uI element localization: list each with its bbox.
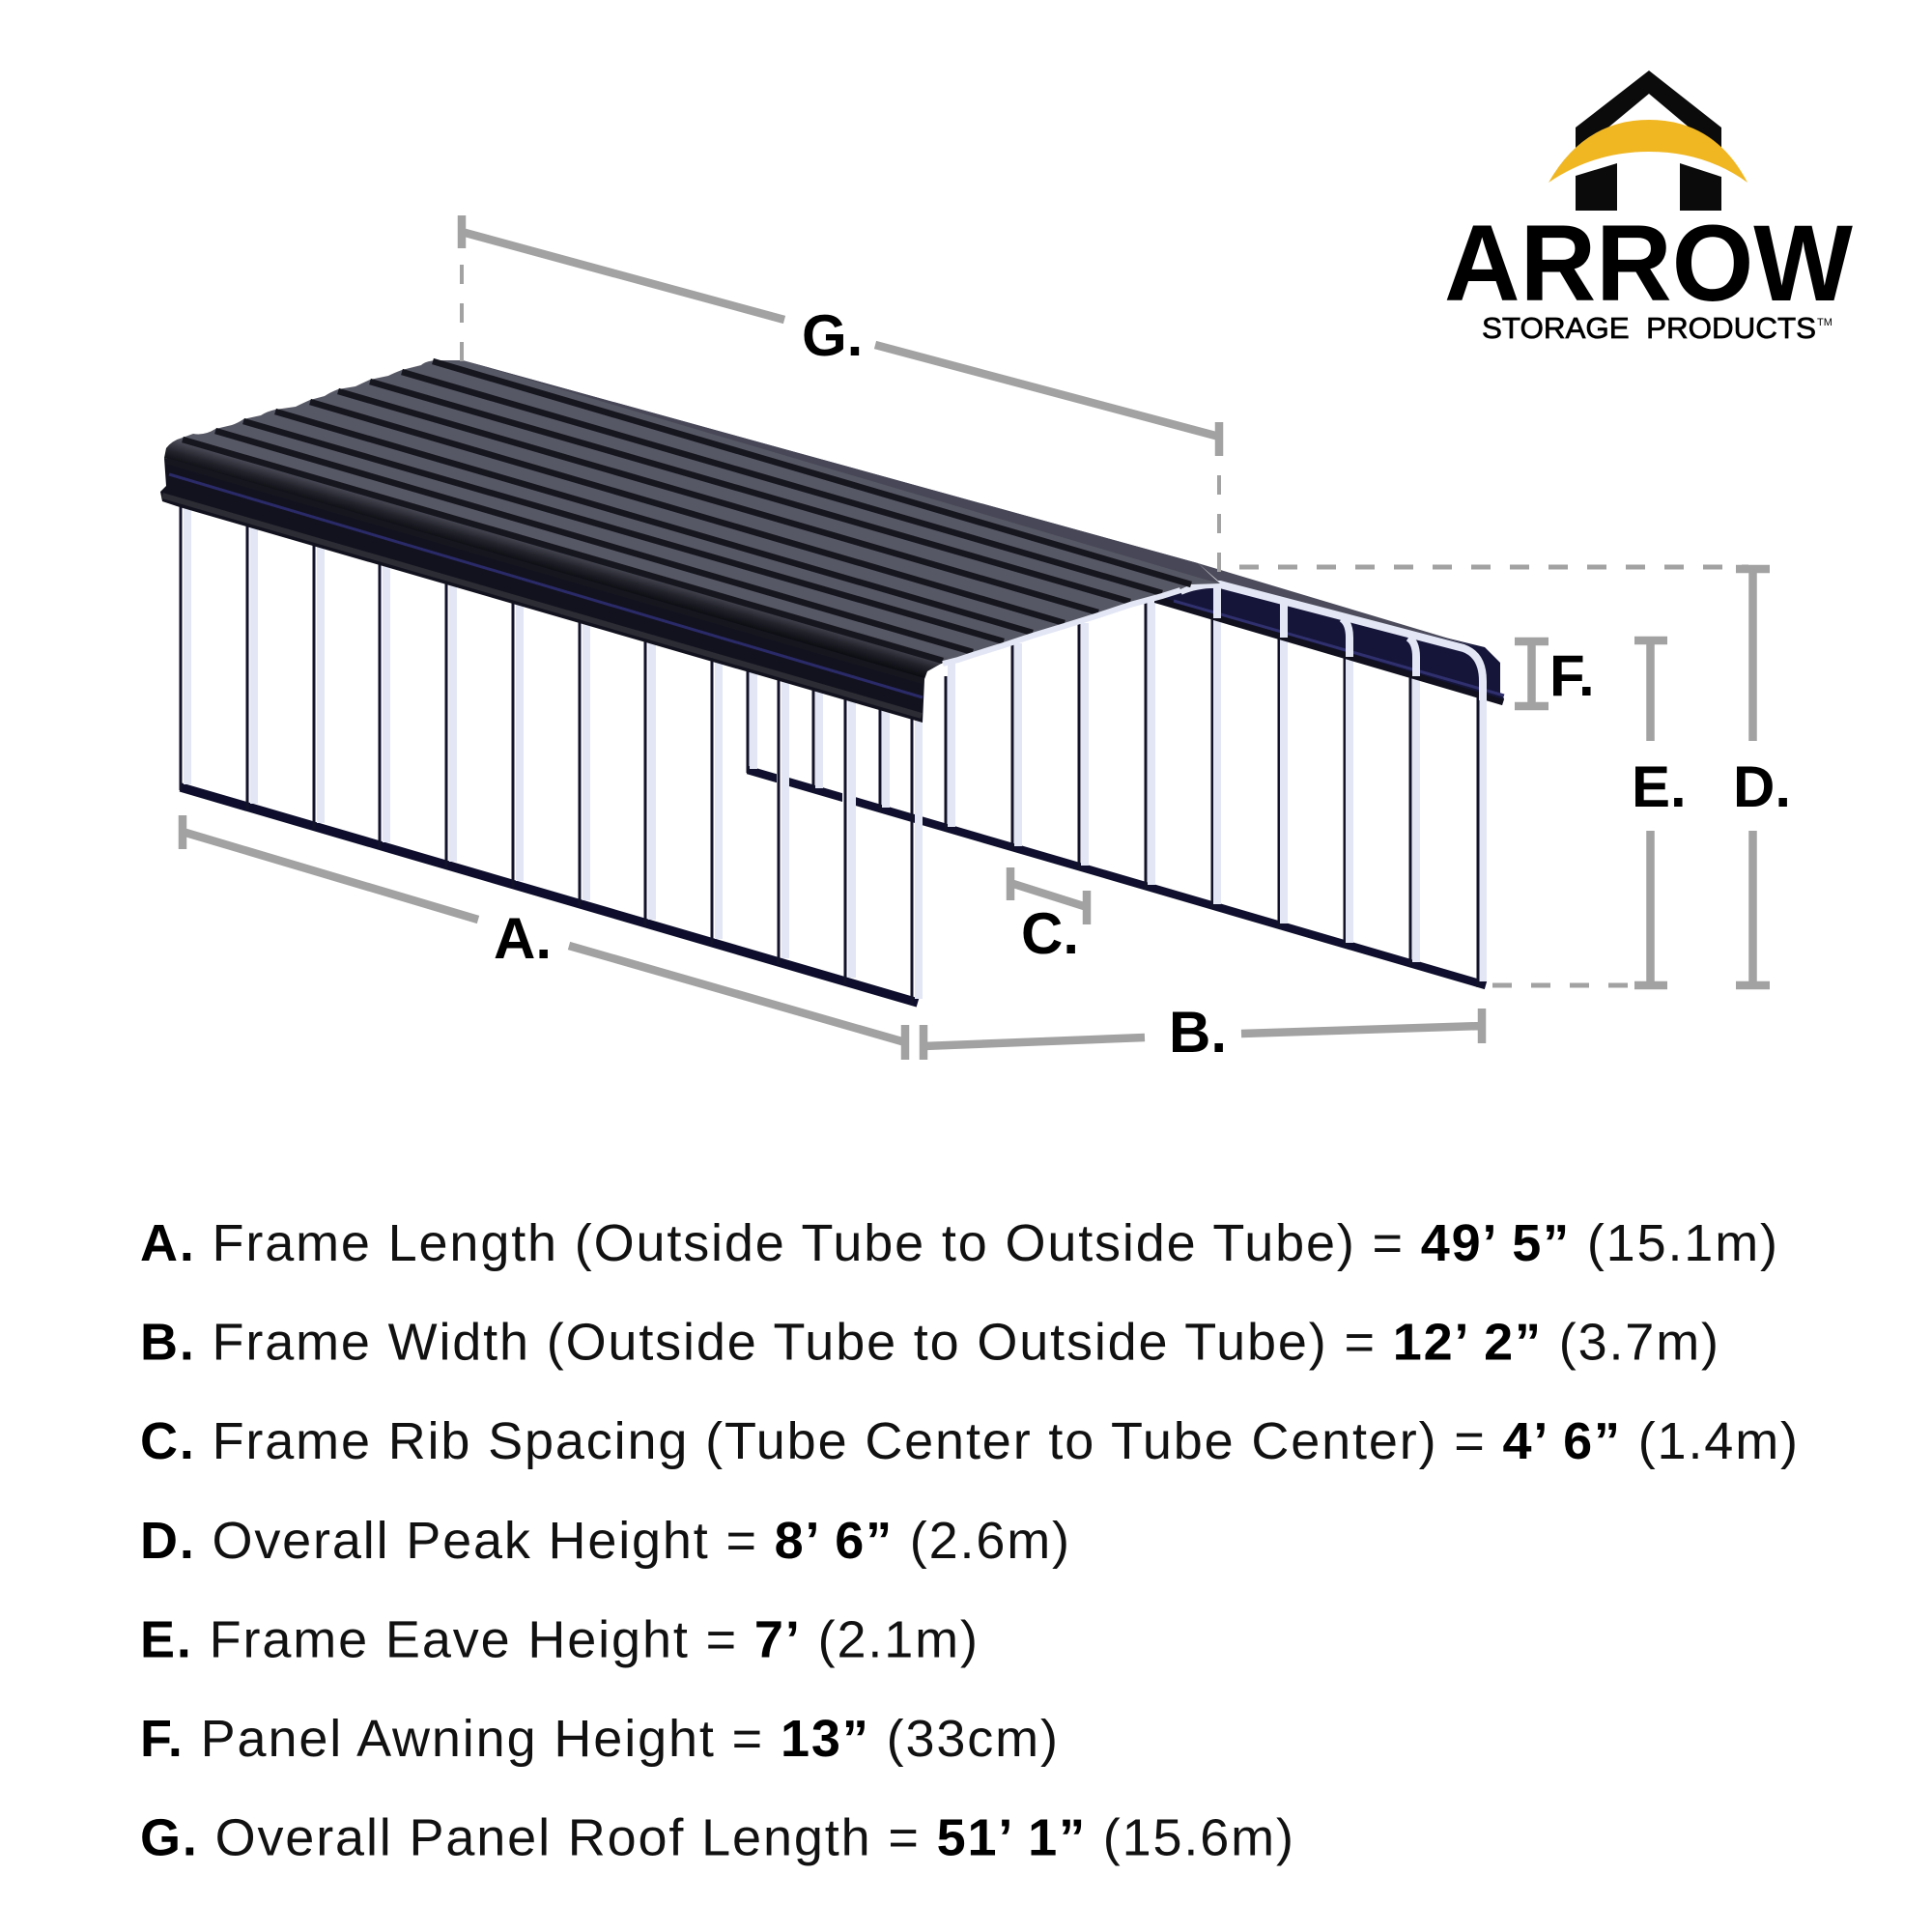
back wall frame <box>748 585 1486 987</box>
logo: house posts <box>1576 163 1721 211</box>
dimension E and base guide <box>1492 640 1687 985</box>
front wall frame <box>181 504 919 1005</box>
spec A: A. Frame Length (Outside Tube to Outside Tube) = 49’ 5” (15.1m) <box>140 1214 1777 1272</box>
spec C: C. Frame Rib Spacing (Tube Center to Tube Center) = 4’ 6” (1.4m) <box>140 1412 1798 1470</box>
dimension G: G. <box>802 303 863 368</box>
dimension C <box>1010 867 1087 966</box>
logo: trademark: TM <box>1817 317 1833 328</box>
spec B: B. Frame Width (Outside Tube to Outside Tube) = 12’ 2” (3.7m) <box>140 1314 1719 1372</box>
dimension E and base guide: E. <box>1632 754 1687 819</box>
dimension B <box>923 1000 1482 1065</box>
dimension C: C. <box>1021 901 1079 966</box>
front fascia <box>160 458 924 723</box>
spec E: E. Frame Eave Height = 7’ (2.1m) <box>140 1610 978 1668</box>
roof front edge trim <box>943 590 1180 664</box>
dimension B: B. <box>1169 1000 1227 1065</box>
back roof band <box>1198 563 1478 647</box>
dimension D and peak guide: D. <box>1733 754 1791 819</box>
dimension G <box>462 215 1219 572</box>
carport illustration <box>160 360 1504 1005</box>
white gable arch <box>1180 584 1483 981</box>
logo: house outline <box>1576 71 1721 155</box>
dimension F <box>1515 641 1595 708</box>
specification list <box>140 1214 1798 1867</box>
roof corrugations <box>166 361 1191 681</box>
spec D: D. Overall Peak Height = 8’ 6” (2.6m) <box>140 1512 1069 1570</box>
roof surface <box>164 360 1220 679</box>
dimension D and peak guide <box>1239 567 1791 985</box>
logo: subline: STORAGE PRODUCTS <box>1482 311 1816 345</box>
logo <box>1444 71 1853 345</box>
spec G: G. Overall Panel Roof Length = 51’ 1” (15.6m) <box>140 1809 1293 1867</box>
back awning fascia <box>1154 582 1504 705</box>
logo: wordmark: ARROW <box>1444 203 1853 324</box>
spec F: F. Panel Awning Height = 13” (33cm) <box>140 1710 1058 1768</box>
dimension A: A. <box>494 906 552 971</box>
roof ridge band <box>463 360 1217 582</box>
logo: yellow arc <box>1548 120 1747 183</box>
dimension A <box>183 815 905 1060</box>
arch rib extensions <box>1217 585 1416 676</box>
dimension F: F. <box>1549 643 1595 708</box>
